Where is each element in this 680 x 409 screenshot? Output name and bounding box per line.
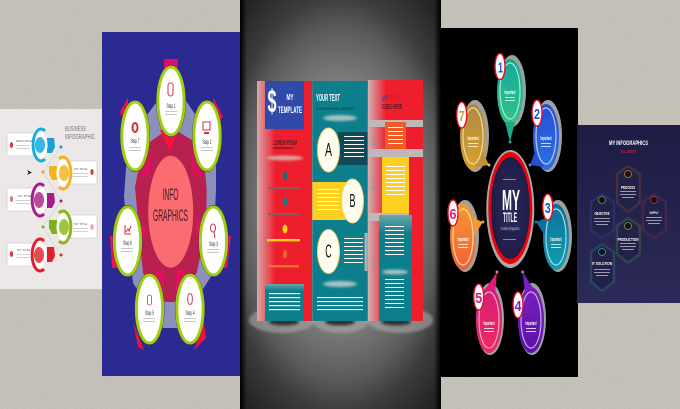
flyer left column (257, 81, 312, 321)
bubble 1: 1 (498, 60, 503, 76)
section 1: 1 (371, 137, 377, 147)
heading: business infographic: BUSINESS (65, 126, 86, 133)
panel: info graphics steps: GRAPHICS (153, 206, 188, 225)
flyer middle column: MY INFOGRAPHIC CREATIVITY (316, 106, 355, 111)
panel: my infographics hexagons: ALL STEPS (620, 149, 636, 154)
connector lines (43, 147, 61, 255)
item A (318, 128, 368, 172)
hexagon production (617, 218, 640, 263)
item C (318, 230, 368, 274)
center circle title: MY (502, 185, 520, 217)
logo block: $ (268, 83, 277, 119)
bubble 1: Important (504, 90, 516, 96)
step 2 orange (42, 157, 97, 189)
hexagon objective: OBJECTIVE (594, 211, 610, 216)
hexagon it solution (591, 244, 614, 291)
bubble 5: 5 (475, 290, 482, 307)
panel: spotlight stage with flyer (240, 0, 441, 409)
lavender polygon (124, 95, 216, 328)
center ellipse title: INFO (162, 185, 178, 204)
center circle title (486, 150, 534, 268)
hexagon it solution: IT SOLUTION (592, 261, 612, 266)
section 3 (371, 215, 412, 321)
step 3 (198, 205, 228, 277)
step 3 purple (7, 184, 62, 216)
step 4 green: MY TITLE (74, 222, 87, 226)
step 7 (120, 100, 150, 172)
grey dividers (368, 120, 423, 127)
hexagon process (617, 166, 640, 212)
hexagon objective (591, 194, 614, 238)
flyer right column: GOES HERE (382, 104, 402, 111)
bubble 4: 4 (514, 298, 522, 315)
icon: cursor arrow (27, 170, 32, 175)
step 6 (112, 205, 142, 277)
section 2: 2 (371, 181, 377, 191)
logo block: MY (286, 93, 294, 102)
step 2 (192, 100, 222, 172)
bubble 7: 7 (459, 108, 465, 125)
step 5 (134, 273, 164, 345)
step 7: Step 7 (130, 139, 140, 145)
section 3: 3 (371, 260, 377, 270)
hexagon process: PROCESS (621, 185, 635, 190)
bubble 4: Important (526, 321, 537, 327)
item C: C (325, 242, 332, 262)
panel: info graphics steps (102, 32, 240, 376)
bottom copy (317, 297, 363, 310)
center ellipse title (148, 156, 193, 268)
crimson polygon (135, 127, 207, 302)
item A: A (325, 140, 332, 160)
flyer left column: LOREM IPSUM (273, 140, 297, 147)
step 5: Step 5 (145, 311, 154, 317)
hexagon supply: SUPPLY (650, 211, 659, 215)
floor shadows (249, 307, 433, 333)
step 5 red: MY TITLE (17, 248, 30, 252)
section 2 (371, 157, 409, 213)
heading: MY INFOGRAPHICS (609, 140, 648, 147)
hexagon supply (643, 194, 666, 238)
step 2: Step 2 (202, 140, 212, 146)
bubble 7: Important (468, 136, 479, 142)
step 3 purple: MY TITLE (18, 194, 31, 198)
bubble 7 (457, 100, 490, 172)
step 6: Step 6 (123, 241, 132, 247)
center circle title: Creative Infographics (500, 226, 520, 231)
bubble 3: Important (550, 237, 562, 243)
step 1 blue: MAIN TITLE (16, 139, 32, 143)
hexagon production: PRODUCTION (618, 237, 638, 242)
item B (312, 179, 364, 223)
bubble 6: Important (458, 237, 469, 243)
bubble 2: Important (540, 136, 552, 142)
logo block: TEMPLATE (278, 105, 302, 115)
item B: B (350, 191, 356, 211)
teal note (265, 284, 304, 321)
center circle title: TITLE (503, 209, 517, 225)
bubble 3: 3 (545, 200, 551, 217)
my stats heading: MY STATS (382, 94, 402, 103)
panel: business infographic (0, 109, 102, 289)
bubble 2 (528, 100, 562, 172)
step 2 orange: MY TITLE (74, 167, 87, 171)
dot list (267, 172, 300, 267)
bubble 3 (534, 194, 572, 272)
step 4 (175, 273, 205, 345)
panel: my infographics hexagons (577, 125, 680, 303)
flyer middle column: YOUR TEXT (316, 93, 340, 104)
step 1 (156, 65, 186, 137)
step 1 blue (7, 129, 62, 161)
bubble 6: 6 (450, 206, 456, 223)
step 4: Step 4 (186, 311, 195, 317)
pink arrows (110, 59, 231, 350)
bubble 4 (513, 270, 546, 355)
flyer right column (368, 80, 423, 321)
bubble 6 (448, 200, 484, 272)
step 3: Step 3 (209, 242, 218, 248)
flyer middle column (312, 81, 368, 321)
bubble 1 (495, 54, 526, 144)
panel: my title dark wheel (441, 28, 578, 377)
bubble 2: 2 (534, 106, 540, 123)
step 1: Step 1 (166, 104, 176, 110)
logo block (265, 81, 304, 129)
bubble 5: Important (484, 321, 495, 327)
section 1 (371, 122, 406, 149)
panel: business infographic: INFOGRAPHIC (65, 134, 95, 141)
step 5 red (7, 239, 62, 271)
step 4 green (42, 211, 97, 243)
bubble 5 (474, 270, 504, 355)
